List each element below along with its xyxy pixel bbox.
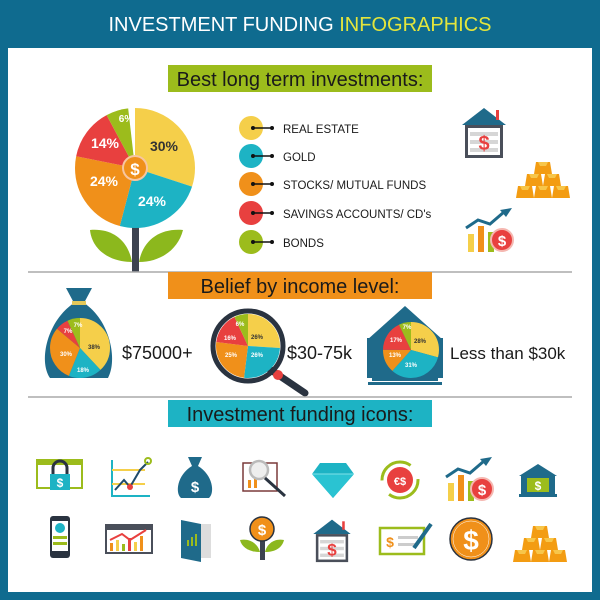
icon: money bag [178,457,212,498]
heading: belief by income level [168,272,432,299]
magnifier pie $30-75k [213,311,353,393]
magnifier pie $30-75k: 16% [224,336,237,342]
icon grid [37,457,567,562]
icon: secure web lock: $ [57,476,64,490]
legend: STOCKS/ MUTUAL FUNDS [283,180,426,192]
bank pie less than $30k [367,306,566,385]
heading: belief by income level: Belief by income level: [201,276,399,298]
icon: currency exchange [382,462,418,498]
bank pie less than $30k: Less than $30k [450,344,566,363]
pie chart tree: 30% [150,138,179,154]
icon: house [313,520,351,562]
pie chart tree: 24% [138,193,167,209]
pie chart tree: 24% [90,173,119,189]
legend: SAVINGS ACCOUNTS/ CD's [283,209,432,221]
magnifier pie $30-75k: 26% [251,335,264,341]
money bag pie $75000+ [45,288,193,378]
magnifier pie $30-75k: 6% [236,322,245,328]
icon: mobile [50,516,70,558]
icon: money plant [240,517,284,560]
heading: investment funding icons [168,400,432,427]
icon: growth chart [446,457,493,501]
heading: investment funding icons: Investment funding icons: [187,404,413,426]
bank pie less than $30k: 13% [389,353,402,359]
icon: cheque [380,524,431,554]
icon: currency exchange: €$ [394,476,406,488]
title: INVESTMENT FUNDING INFOGRAPHICS [108,14,492,36]
icon: report folder [181,520,211,562]
legend [239,116,432,254]
pie chart tree [90,114,183,272]
icon: magnifier board [243,461,285,496]
icon: coin: $ [130,160,140,179]
icon: growth chart [466,208,513,252]
pie chart tree: 6% [119,114,133,125]
icon: money bag: $ [191,479,200,496]
icon: diamond [312,463,354,498]
icon: dollar coin [450,518,492,560]
legend: REAL ESTATE [283,124,359,136]
icon: cheque: $ [386,534,394,550]
icon: browser chart [106,525,152,553]
icon: gold bars [513,526,567,562]
icon: bank [519,464,557,497]
magnifier pie $30-75k: $30-75k [287,343,353,363]
icon: money plant: $ [258,522,267,539]
bank pie less than $30k: 7% [403,325,412,331]
money bag pie $75000+: 7% [74,323,83,329]
icon: secure web lock [37,460,82,490]
icon: dollar coin: $ [463,525,479,556]
magnifier pie $30-75k: 25% [225,353,238,359]
icon: house [462,108,506,158]
pie chart tree: 14% [91,135,120,151]
icon: gold bars [516,162,570,198]
legend: BONDS [283,238,324,250]
bank pie less than $30k: 17% [390,338,403,344]
icon: coin [123,156,147,180]
legend: GOLD [283,152,316,164]
money bag pie $75000+: 18% [77,368,90,374]
stem and leaves [90,225,183,272]
icon: line chart [112,458,151,496]
heading: best long term investments: Best long term investments: [177,69,423,91]
money bag pie $75000+: 30% [60,352,73,358]
bank pie less than $30k: 28% [414,339,427,345]
icon: bank: $ [535,479,542,493]
bank pie less than $30k: 31% [405,363,418,369]
money bag pie $75000+: 7% [64,329,73,335]
magnifier pie $30-75k: 26% [251,353,264,359]
money bag pie $75000+: $75000+ [122,343,193,363]
money bag pie $75000+: 38% [88,345,101,351]
